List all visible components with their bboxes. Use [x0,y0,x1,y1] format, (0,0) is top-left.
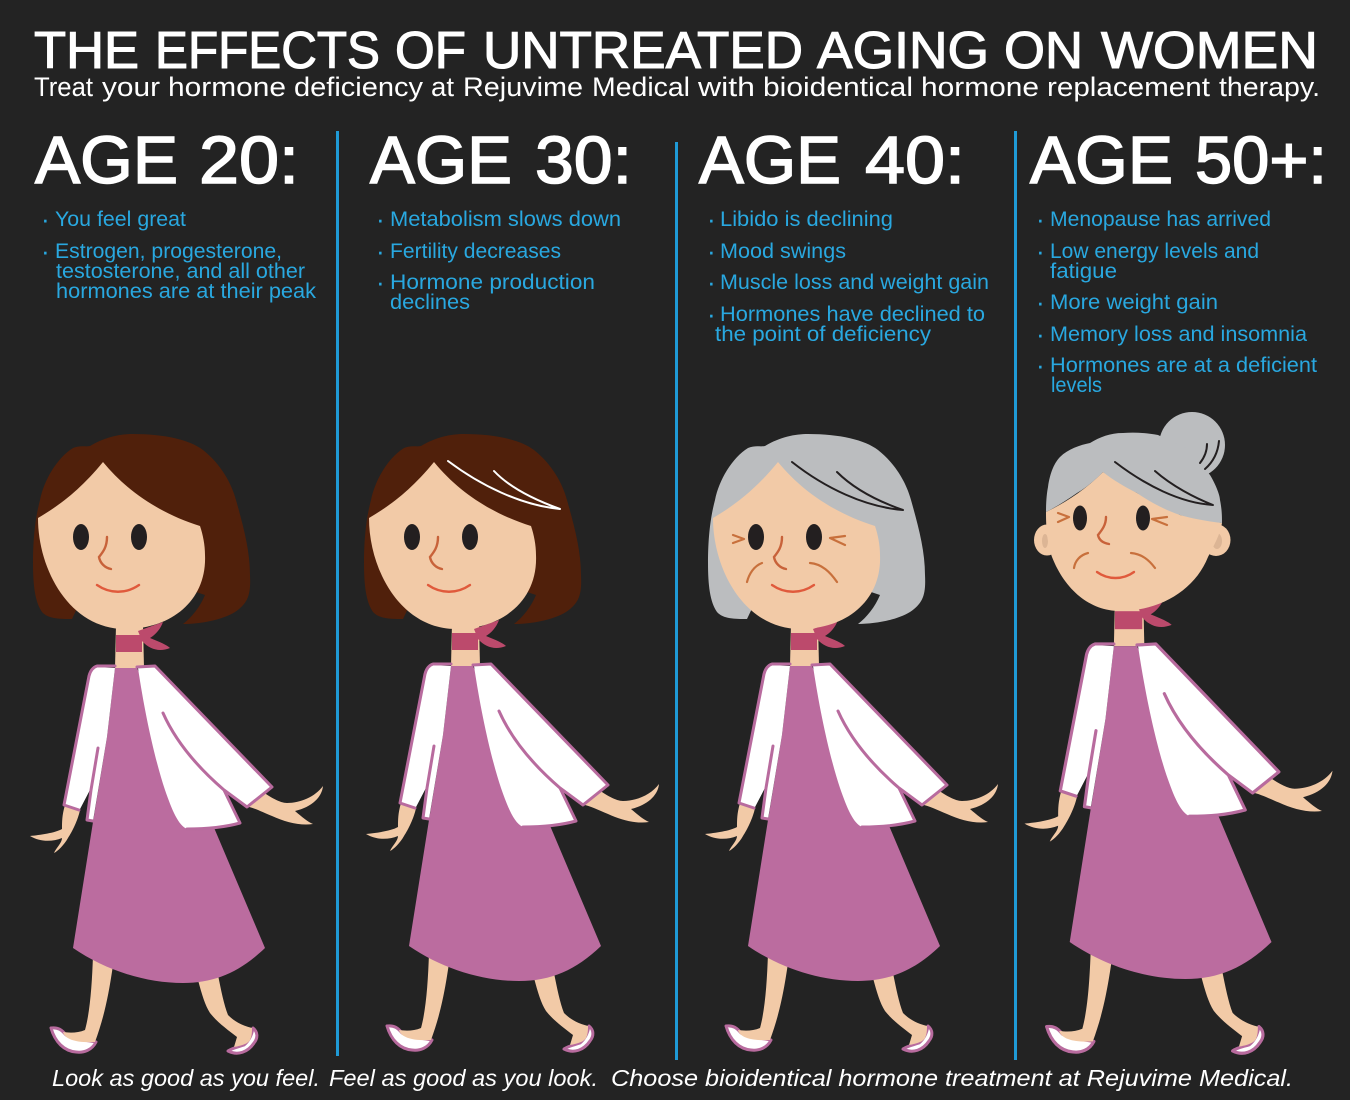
title: AGING [817,22,989,80]
figure: woman age 40 [705,434,998,1051]
list: age 40 symptoms: · [707,267,716,297]
panel: age 50+ [1025,123,1332,1053]
subtitle: therapy. [1219,72,1320,102]
figure: woman age 50+ [1025,412,1332,1053]
list: age 50+ symptoms: · [1036,204,1045,234]
list: age 40 symptoms: the point of deficiency [715,323,932,346]
subtitle: bioidentical [763,72,913,102]
list: age 30 symptoms: Fertility decreases [390,240,561,263]
heading: age 40: 40: [865,123,965,198]
list: age 50+ symptoms: · [1036,350,1045,380]
list: age 40 symptoms [707,204,989,346]
list: age 20 symptoms: Estrogen, progesterone, [55,240,282,263]
title: WOMEN [1101,22,1318,80]
heading: age 30: 30: [535,123,632,198]
heading: age 20: AGE [35,123,178,198]
list: age 30 symptoms: Hormone production [390,271,595,294]
list: age 40 symptoms: Libido is declining [720,208,893,231]
subtitle: at [431,72,454,102]
list: age 40 symptoms: Mood swings [720,240,846,263]
figure: woman age 20 [30,434,323,1053]
subtitle [34,72,1320,102]
title: EFFECTS [155,22,380,80]
footer tagline: Feel as good as you look. [329,1065,598,1091]
heading: age 30: AGE [370,123,512,198]
heading: age 20: 20: [199,123,299,198]
subtitle: Medical [592,72,690,102]
list: age 30 symptoms: · [376,204,385,234]
list: age 50+ symptoms: Memory loss and insomnia [1050,323,1307,346]
title [34,22,1318,80]
subtitle: with [697,72,755,102]
list: age 20 symptoms: hormones are at their peak [56,280,317,303]
heading: age 50+ [1030,123,1327,198]
list: age 30 symptoms: · [376,267,385,297]
list: age 40 symptoms: Hormones have declined to [720,303,985,326]
list: age 50+ symptoms: Menopause has arrived [1050,208,1271,231]
list: age 50+ symptoms: · [1036,319,1045,349]
heading: age 40 [699,123,965,198]
title: UNTREATED [483,22,803,80]
subtitle: your [102,72,160,102]
title: OF [395,22,466,80]
list: age 20 symptoms [41,204,317,303]
list: age 40 symptoms: · [707,204,716,234]
heading: age 40: AGE [699,123,841,198]
list: age 50+ symptoms [1036,204,1317,397]
title: THE [34,22,139,80]
subtitle: replacement [1047,72,1211,102]
panel: age 20 [30,123,323,1053]
list: age 50+ symptoms: Hormones are at a deficient [1050,354,1317,377]
subtitle: Treat [34,72,93,102]
list: age 30 symptoms: · [376,236,385,266]
list: age 20 symptoms: · [41,204,50,234]
list: age 30 symptoms [376,204,621,314]
heading: age 20 [35,123,299,198]
heading: age 50+: 50+: [1195,123,1327,198]
subtitle: hormone [921,72,1039,102]
list: age 40 symptoms: · [707,236,716,266]
list: age 50+ symptoms: Low energy levels and [1050,240,1259,263]
panel: age 40 [699,123,998,1051]
list: age 50+ symptoms: fatigue [1050,260,1117,283]
subtitle: deficiency [294,72,424,102]
list: age 50+ symptoms: More weight gain [1050,291,1218,314]
footer tagline: Look as good as you feel. [52,1065,320,1091]
list: age 50+ symptoms: · [1036,287,1045,317]
list: age 20 symptoms: You feel great [55,208,186,231]
heading: age 50+: AGE [1030,123,1173,198]
title: ON [1004,22,1083,80]
subtitle: Rejuvime [463,72,583,102]
list: age 30 symptoms: declines [390,291,470,314]
list: age 30 symptoms: Metabolism slows down [390,208,621,231]
panel: age 30 [364,123,659,1051]
footer tagline: Choose bioidentical hormone treatment at Rejuvime Medical. [611,1065,1293,1091]
list: age 40 symptoms: · [707,299,716,329]
list: age 50+ symptoms: levels [1051,374,1102,397]
heading: age 30 [370,123,632,198]
subtitle: hormone [168,72,286,102]
footer tagline [52,1065,1293,1091]
list: age 50+ symptoms: · [1036,236,1045,266]
list: age 20 symptoms: testosterone, and all other [56,260,305,283]
list: age 40 symptoms: Muscle loss and weight gain [720,271,989,294]
list: age 20 symptoms: · [41,236,50,266]
figure: woman age 30 [364,434,659,1051]
